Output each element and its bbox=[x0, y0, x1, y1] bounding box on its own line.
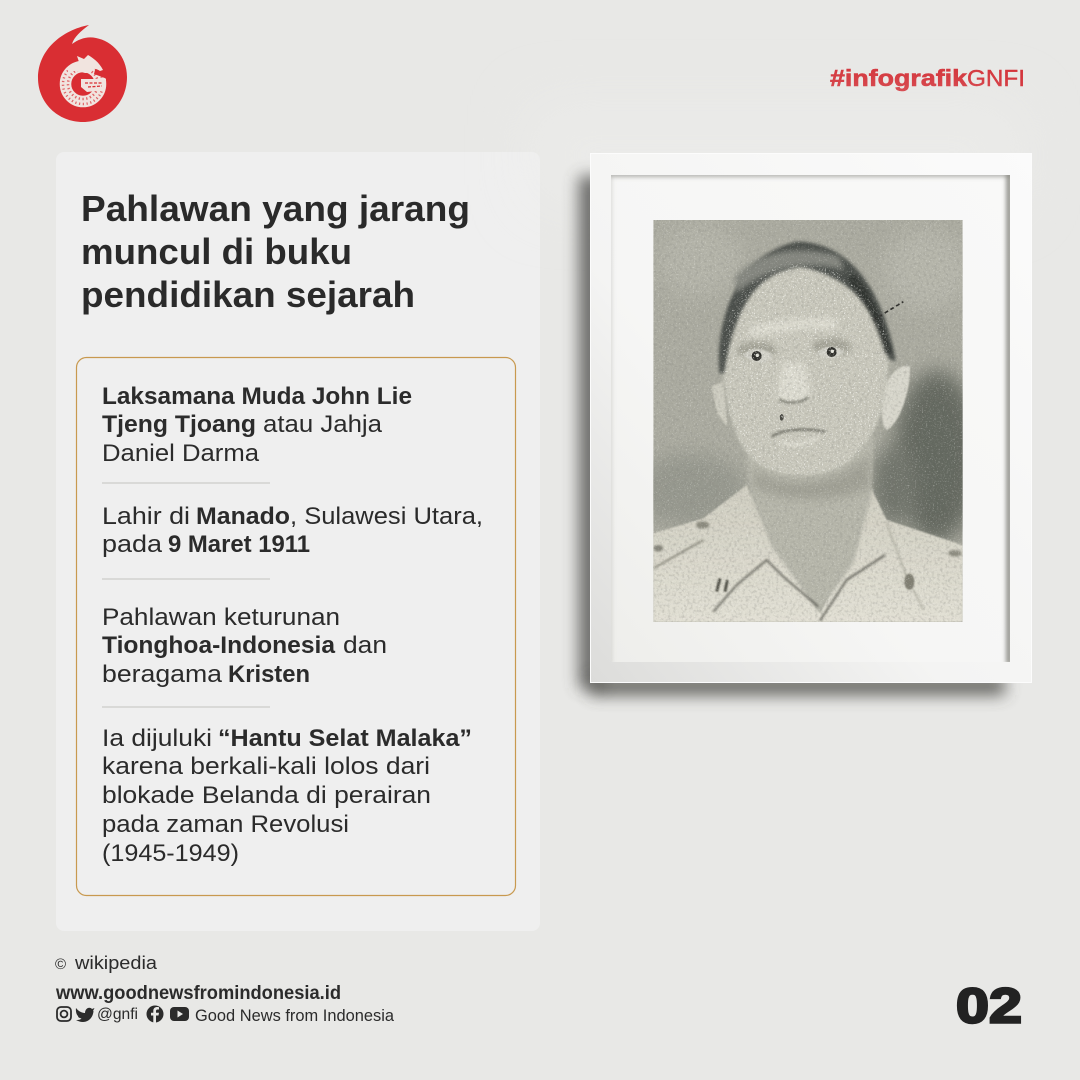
fact: name: Daniel Darma bbox=[102, 440, 260, 467]
fact: nickname: blokade Belanda di perairan bbox=[102, 782, 431, 809]
photo credit: © bbox=[55, 956, 66, 973]
channel name: Good News from Indonesia bbox=[195, 1006, 395, 1025]
hair bbox=[719, 242, 896, 373]
handle: @gnfi bbox=[97, 1006, 138, 1023]
fact: name: Tjeng Tjoang bbox=[102, 411, 256, 438]
footer social row bbox=[57, 1006, 395, 1025]
fact: birth: pada bbox=[102, 531, 163, 558]
left ear bbox=[712, 382, 727, 427]
heading bbox=[81, 188, 470, 315]
fact: name bbox=[102, 383, 412, 467]
framed portrait bbox=[530, 105, 1032, 695]
fact: nickname: Ia dijuluki bbox=[102, 725, 212, 752]
fact: nickname bbox=[102, 725, 472, 867]
outlined facts box bbox=[76, 358, 516, 896]
fact: nickname: “Hantu Selat Malaka” bbox=[218, 725, 472, 752]
fact: birth: 9 Maret 1911 bbox=[168, 531, 310, 558]
panel: biography bbox=[56, 152, 540, 931]
face bbox=[722, 257, 888, 475]
portrait photo: John Lie bbox=[653, 220, 963, 622]
white frame bbox=[590, 153, 1032, 683]
fact: birth: Manado bbox=[196, 503, 290, 530]
neck bbox=[745, 437, 874, 612]
fact: name: atau Jahja bbox=[263, 411, 383, 438]
hashtag: GNFI bbox=[967, 65, 1025, 91]
heading: pendidikan sejarah bbox=[81, 274, 415, 315]
footer website: www.goodnewsfromindonesia.id bbox=[55, 983, 341, 1004]
hashtag: #infografik bbox=[830, 65, 967, 91]
collar lines and insignia bbox=[653, 521, 962, 621]
icon: instagram bbox=[57, 1007, 71, 1021]
fact: birth: , Sulawesi Utara, bbox=[290, 503, 483, 530]
photo credit: wikipedia bbox=[74, 953, 158, 973]
fact: birth bbox=[102, 503, 483, 558]
photo grain bbox=[653, 220, 963, 622]
fact: heritage: Pahlawan keturunan bbox=[102, 604, 340, 631]
mat board bbox=[605, 171, 1016, 664]
fact: name: Laksamana Muda John Lie bbox=[102, 383, 412, 410]
icon: facebook bbox=[146, 1006, 164, 1022]
fact: birth: Lahir di bbox=[102, 503, 190, 530]
heading: muncul di buku bbox=[81, 231, 352, 272]
fact: heritage: beragama bbox=[102, 661, 223, 688]
fact: heritage bbox=[102, 604, 387, 688]
right ear bbox=[882, 366, 910, 430]
page number: 02 bbox=[956, 980, 1022, 1034]
facial features bbox=[737, 302, 903, 444]
heading: Pahlawan yang jarang bbox=[81, 188, 470, 229]
fact: nickname: karena berkali-kali lolos dari bbox=[102, 753, 430, 780]
background shading bbox=[633, 223, 980, 543]
fact: heritage: Tionghoa-Indonesia bbox=[102, 632, 336, 659]
icon: twitter bbox=[76, 1008, 94, 1022]
shirt bbox=[653, 485, 963, 622]
frame drop shadow bbox=[530, 105, 1020, 695]
fact: heritage: dan bbox=[343, 632, 387, 659]
fact: nickname: (1945-1949) bbox=[102, 840, 239, 867]
logo: GNFI red six with garuda G bbox=[38, 25, 127, 122]
fact: nickname: pada zaman Revolusi bbox=[102, 811, 349, 838]
fact: heritage: Kristen bbox=[228, 661, 310, 688]
icon: youtube bbox=[170, 1007, 189, 1021]
hashtag bbox=[830, 65, 1025, 91]
